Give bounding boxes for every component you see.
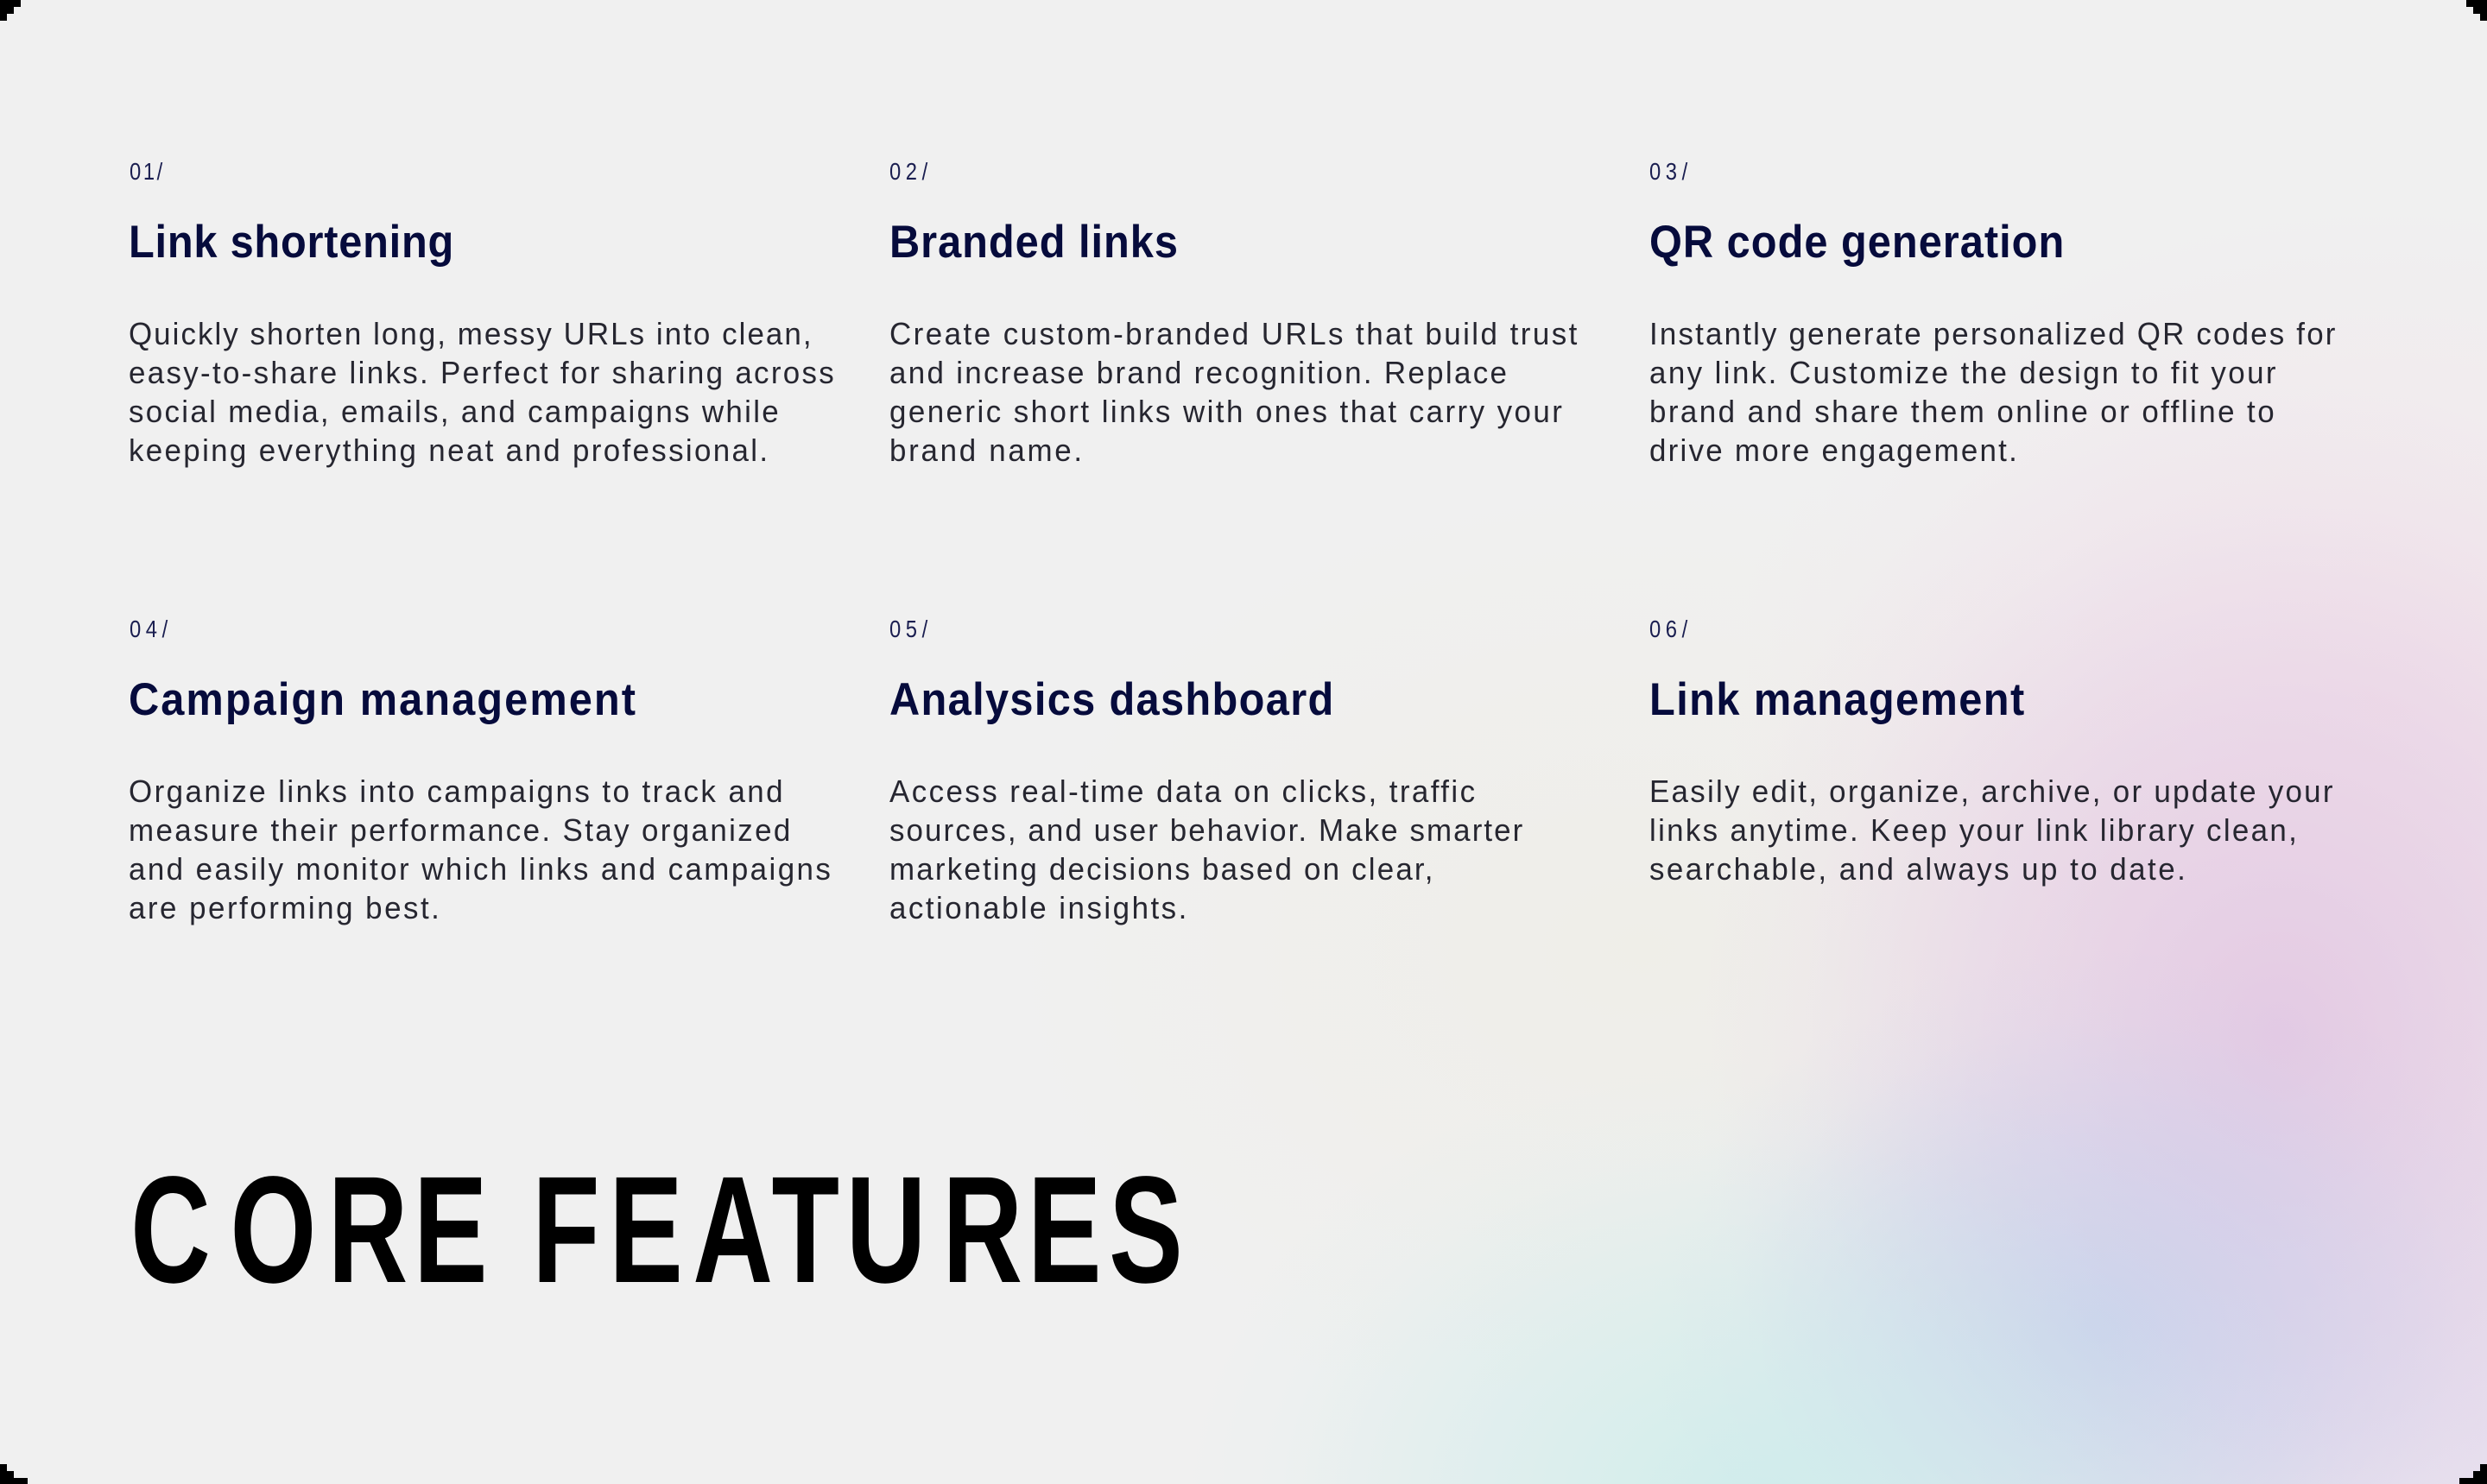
body 01: Quickly shorten long, messy URLs into clean, bbox=[129, 317, 812, 351]
body 03 bbox=[1649, 317, 2336, 468]
number 02: 02/ bbox=[889, 157, 928, 185]
corner: bottom left bbox=[0, 1464, 28, 1484]
number 01: 01/ bbox=[130, 157, 163, 185]
body 02: brand name. bbox=[889, 433, 1082, 468]
body 06: links anytime. Keep your link library clean, bbox=[1649, 813, 2297, 848]
body 03: brand and share them online or offline to bbox=[1649, 395, 2275, 429]
body 01 bbox=[129, 317, 834, 468]
body 03: Instantly generate personalized QR codes for bbox=[1649, 317, 2336, 351]
feature 05: Analysics dashboard bbox=[889, 615, 1523, 925]
corner: top right bbox=[2466, 0, 2487, 21]
number 06: 06/ bbox=[1649, 615, 1688, 642]
feature 06: Link management bbox=[1649, 615, 2333, 887]
heading 06: Link management bbox=[1649, 673, 2024, 724]
number 04: 04/ bbox=[130, 615, 168, 642]
body 03: drive more engagement. bbox=[1649, 433, 2017, 468]
corner: top left bbox=[0, 0, 21, 21]
body 04: are performing best. bbox=[129, 891, 440, 925]
feature 03: QR code generation bbox=[1649, 157, 2336, 468]
title: CORE FEATURES bbox=[130, 1145, 1183, 1315]
body 02 bbox=[889, 317, 1578, 468]
body 06 bbox=[1649, 774, 2333, 887]
body 01: social media, emails, and campaigns while bbox=[129, 395, 779, 429]
body 04 bbox=[129, 774, 831, 925]
body 03: any link. Customize the design to fit your bbox=[1649, 356, 2276, 390]
body 04: Organize links into campaigns to track and bbox=[129, 774, 783, 809]
feature 01: Link shortening bbox=[129, 157, 834, 468]
body 02: generic short links with ones that carry your bbox=[889, 395, 1562, 429]
body 04: measure their performance. Stay organized bbox=[129, 813, 790, 848]
heading 05: Analysics dashboard bbox=[889, 673, 1333, 724]
corner: bottom right bbox=[2459, 1464, 2487, 1484]
body 06: searchable, and always up to date. bbox=[1649, 852, 2186, 887]
body 01: keeping everything neat and professional. bbox=[129, 433, 768, 468]
body 02: Create custom-branded URLs that build trust bbox=[889, 317, 1578, 351]
body 05: sources, and user behavior. Make smarter bbox=[889, 813, 1523, 848]
body 02: and increase brand recognition. Replace bbox=[889, 356, 1507, 390]
heading 02: Branded links bbox=[889, 216, 1178, 267]
body 05: actionable insights. bbox=[889, 891, 1187, 925]
heading 01: Link shortening bbox=[129, 216, 453, 267]
feature 02: Branded links bbox=[889, 157, 1578, 468]
number 05: 05/ bbox=[889, 615, 928, 642]
body 05: Access real-time data on clicks, traffic bbox=[889, 774, 1475, 809]
body 05 bbox=[889, 774, 1523, 925]
body 04: and easily monitor which links and campaigns bbox=[129, 852, 831, 887]
feature 04: Campaign management bbox=[129, 615, 831, 925]
heading 03: QR code generation bbox=[1649, 216, 2064, 267]
body 05: marketing decisions based on clear, bbox=[889, 852, 1433, 887]
heading 04: Campaign management bbox=[129, 673, 636, 724]
body 01: easy-to-share links. Perfect for sharing across bbox=[129, 356, 834, 390]
number 03: 03/ bbox=[1649, 157, 1688, 185]
body 06: Easily edit, organize, archive, or update your bbox=[1649, 774, 2333, 809]
